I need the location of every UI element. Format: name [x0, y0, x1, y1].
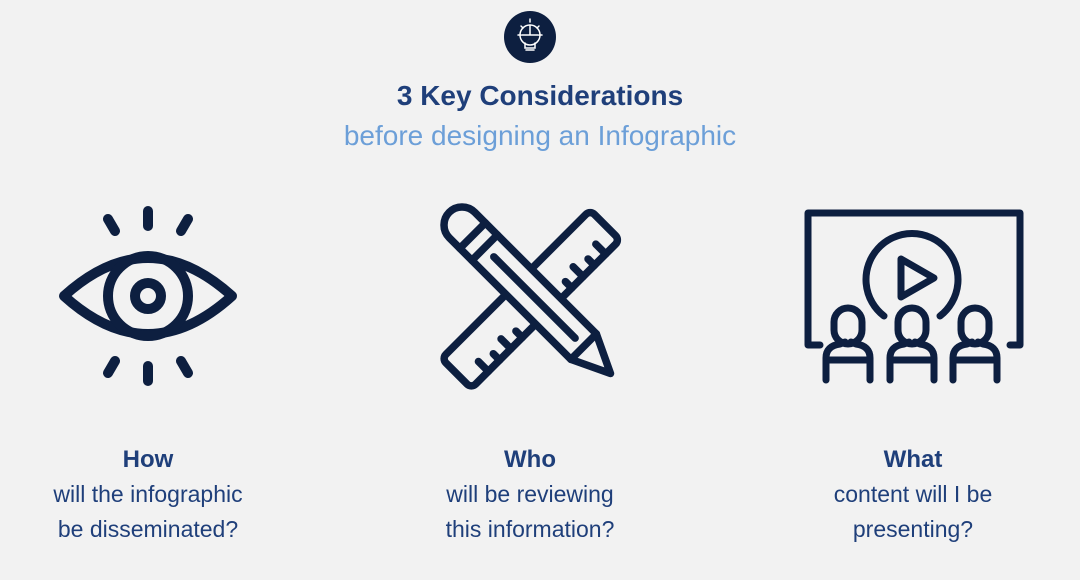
column: who: this information? [446, 516, 614, 542]
title: 3 Key Considerations [397, 80, 683, 111]
icon: pencil and ruler [440, 203, 622, 390]
column: who: will be reviewing [446, 481, 614, 507]
column: what: presenting? [853, 516, 973, 542]
column: how: be disseminated? [58, 516, 238, 542]
column: what: What [884, 446, 942, 473]
ruler [442, 210, 620, 388]
column: who: Who [504, 446, 556, 473]
icon: eye [59, 206, 237, 386]
top icon: lightbulb puzzle [504, 11, 556, 63]
column: what: content will I be [834, 481, 992, 507]
icon: presentation [804, 210, 1024, 384]
subtitle: before designing an Infographic [344, 120, 736, 151]
pencil [437, 200, 623, 386]
column: how [53, 446, 243, 542]
column: how: How [123, 446, 173, 473]
column: who [446, 446, 614, 542]
column: what [834, 446, 992, 542]
column: how: will the infographic [53, 481, 243, 507]
